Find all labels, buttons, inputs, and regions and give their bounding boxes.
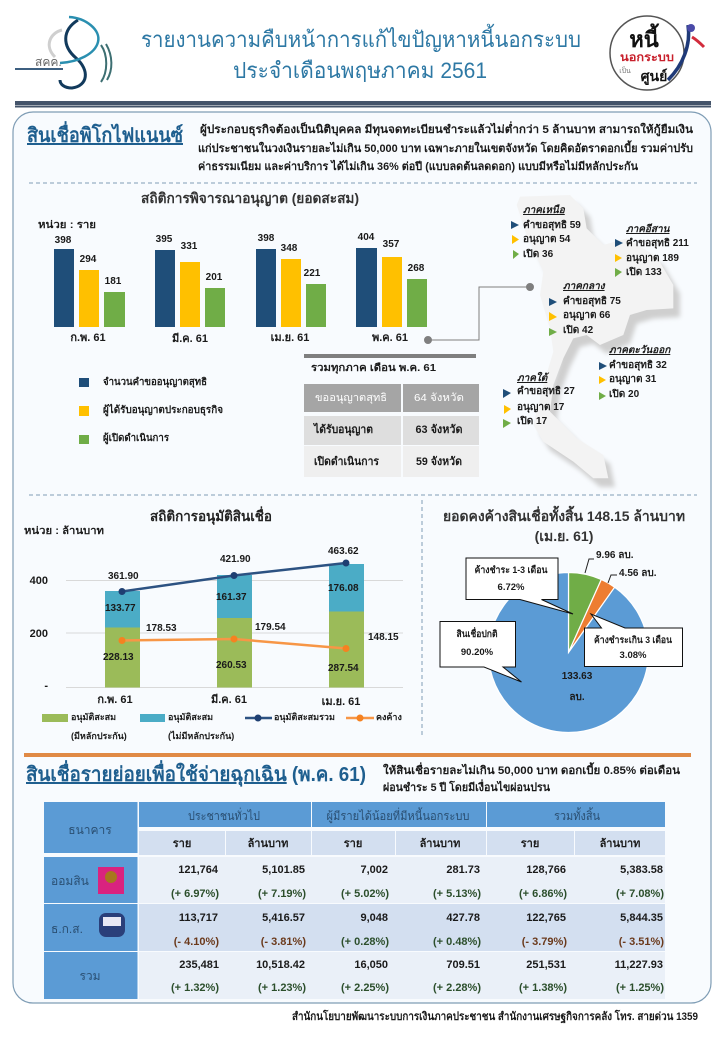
table headers [44,802,665,855]
table headers: ธนาคาร [68,823,112,837]
row: GSB: (+ 7.19%) [258,888,306,900]
row: total: (+ 1.38%) [519,982,567,994]
row: GSB: 121,764 [178,864,219,876]
chart title: สถิติการอนุมัติสินเชื่อ [150,506,272,525]
row: GSB: (+ 6.97%) [171,888,219,900]
map: central region: อนุญาต 66 [563,310,611,321]
row: GSB: 5,101.85 [262,864,305,876]
row: BAAC: (- 3.51%) [619,936,664,948]
row: BAAC: (- 3.79%) [522,936,567,948]
callout: overdue 1-3 months: 6.72% [498,582,525,593]
row: GSB: ออมสิน [51,874,89,888]
value labels [103,546,399,674]
map: south region: อนุญาต 17 [517,402,565,413]
callout: normal credit: สินเชื่อปกติ [456,626,498,640]
map: east region: อนุญาต 31 [609,374,657,385]
map: Thailand [517,195,680,487]
map: south region: เปิด 17 [517,415,548,427]
logo: debt to zero: หนี้ [629,23,660,52]
map: northeast region: ภาคอีสาน [626,223,671,235]
row: BAAC: 427.78 [446,912,480,924]
value labels: 228.13 [103,652,134,663]
row: total: 709.51 [446,959,480,971]
row: BAAC: 5,844.35 [620,912,663,924]
table: all regions summary: รวมทุกภาค เดือน พ.ค. 61 [311,362,436,374]
panel: pico finance intro [27,120,693,173]
heading: pico finance: สินเชื่อพิโกไฟแนนซ์ [27,120,183,147]
table headers: ราย [521,838,539,850]
month labels: เม.ย. 61 [271,332,309,344]
legend: licensing: จำนวนคำขออนุญาตสุทธิ [103,376,207,388]
row: BAAC: 9,048 [360,912,388,924]
legend: credit approvals: (มีหลักประกัน) [71,731,127,741]
row: total: รวม [79,969,101,983]
row: total: 235,481 [179,959,219,971]
text block: emergency credit terms: ผ่อนชำระ 5 ปี โดยมีเงื่อนไขผ่อนปรน [383,779,550,794]
table: all regions summary: ขออนุญาตสุทธิ [315,392,387,404]
axis: - [44,680,48,692]
row: GSB: (+ 6.86%) [519,888,567,900]
legend: credit approvals: คงค้าง [376,712,402,722]
legend: credit approvals: อนุมัติสะสมรวม [274,712,335,723]
logo: debt to zero: เป็น [619,66,631,75]
row: total: 16,050 [354,959,388,971]
table headers: รวมทั้งสิ้น [554,807,600,823]
map: east region: ภาคตะวันออก [609,344,671,356]
slice label: 9.96 [585,550,634,573]
row: total: (+ 2.28%) [433,982,481,994]
cumulative total line [118,560,350,595]
value labels: 178.53 [146,623,177,634]
slice label: 9.96: 9.96 ลบ. [596,550,634,561]
row: BAAC [44,904,665,951]
row: BAAC: 122,765 [526,912,566,924]
pie chart: outstanding credit: (เม.ย. 61) [535,528,593,544]
bar values: 398 [258,233,275,244]
table headers: ล้านบาท [420,837,460,850]
logo: left agency mark [15,17,111,88]
map: northeast region: เปิด 133 [626,266,662,278]
month labels: ก.พ. 61 [97,694,133,706]
map: east region [599,344,671,400]
month labels [70,332,408,345]
logo: debt to zero: ศูนย์ [641,68,667,85]
row: total: (+ 1.32%) [171,982,219,994]
row: GSB: (+ 7.08%) [616,888,664,900]
map: northeast region: อนุญาต 189 [626,253,679,264]
bars [54,248,427,327]
callout: overdue 1-3 months [466,558,573,614]
callout: overdue over 3 months [584,614,682,666]
slice label: normal value: ลบ. [569,692,585,703]
row: total: (+ 1.25%) [616,982,664,994]
map: east region: คำขอสุทธิ 32 [609,359,667,371]
value labels: 463.62 [328,546,359,557]
row: BAAC: (- 4.10%) [174,936,219,948]
bar values [55,232,425,287]
row: GSB: 281.73 [446,864,480,876]
legend: credit approvals: อนุมัติสะสม [168,712,213,723]
axis: 200 [30,628,48,640]
divider: orange [24,753,691,757]
map: north region [511,204,581,260]
legend: credit approvals [42,712,402,741]
logo: debt to zero: นอกระบบ [620,52,674,64]
row: BAAC: 113,717 [179,912,218,924]
bar values: 221 [304,268,321,279]
table: emergency credit by bank [44,802,665,999]
table headers: ประชาชนทั่วไป [188,807,260,823]
map: south region: คำขอสุทธิ 27 [517,385,575,397]
value labels: 287.54 [328,663,359,674]
value labels: 179.54 [255,622,286,633]
table headers: ล้านบาท [248,837,288,850]
legend: licensing: ผู้เปิดดำเนินการ [103,432,170,445]
map: south region: ภาคใต้ [517,371,550,384]
month labels [97,693,360,708]
row: GSB: 128,766 [526,864,566,876]
text block: pico description [198,121,693,173]
pie slices [488,572,648,732]
value labels: 133.77 [105,603,136,614]
text block: pico description: ผู้ประกอบธุรกิจต้องเป็นนิติบุคคล มีทุนจดทะเบียนชำระแล้วไม่ต่ำกว่า 5 ล้านบาท สามารถให้กู้ยืมเงิน [200,121,693,137]
axis: 400 [30,575,48,587]
row: total [44,952,665,999]
value labels: 361.90 [108,571,139,582]
map: north region: ภาคเหนือ [523,204,566,216]
bar values: 268 [408,263,425,274]
month labels: มี.ค. 61 [211,693,247,706]
legend: licensing: ผู้ได้รับอนุญาตประกอบธุรกิจ [103,403,223,417]
table: all regions summary: 64 จังหวัด [414,392,464,404]
callout: overdue over 3 months: 3.08% [620,650,647,661]
title: รายงานความคืบหน้าการแก้ไขปัญหาหนี้นอกระบบ [141,24,581,52]
callout: overdue over 3 months: ค้างชำระเกิน 3 เดือน [594,634,672,646]
row: GSB: (+ 5.02%) [341,888,389,900]
stacked bars [105,564,364,688]
map: south region [503,371,575,428]
text block: pico description: ค่าธรรมเนียม และค่าบริการ ได้ไม่เกิน 36% ต่อปี (แบบลดต้นลดดอก) แบบมีหรือไม่มีหลักประกัน [198,159,638,173]
logo: debt to zero [610,16,704,90]
map: central region [549,281,621,336]
slice label: 4.56: 4.56 ลบ. [619,568,657,579]
value labels: 260.53 [216,660,247,671]
table: all regions summary: ได้รับอนุญาต [312,422,373,437]
chart title: ยอดคงค้างสินเชื่อทั้งสิ้น 148.15 ล้านบาท [443,505,685,524]
map: east region: เปิด 20 [609,388,640,400]
header rule [15,101,711,108]
table: all regions summary: 63 จังหวัด [416,423,462,436]
unit label: หน่วย : ล้านบาท [24,525,104,537]
axis [30,575,403,692]
text block: pico description: แก่ประชาชนในวงเงินรายละไม่เกิน 50,000 บาท เฉพาะภายในเขตจังหวัด โดยคิดอัตราดอกเบี้ย รวมค่าปรับ [198,140,693,155]
slice label: normal value [562,671,593,703]
value labels: 161.37 [216,592,247,603]
bar values: 181 [105,276,122,287]
row: BAAC: (+ 0.48%) [433,936,481,948]
row: GSB: (+ 5.13%) [433,888,481,900]
pie chart: outstanding credit [440,505,685,732]
bar values: 357 [383,239,400,250]
map: north region: เปิด 36 [523,248,554,260]
row: GSB: 5,383.58 [620,864,663,876]
table headers: ผู้มีรายได้น้อยที่มีหนี้นอกระบบ [326,807,470,824]
table headers: ราย [344,838,362,850]
row: BAAC: (- 3.81%) [261,936,306,948]
month labels: มี.ค. 61 [172,332,208,345]
row: total: 10,518.42 [256,959,305,971]
legend: credit approvals: (ไม่มีหลักประกัน) [168,730,234,741]
map: northeast region: คำขอสุทธิ 211 [626,237,689,249]
slice label: 4.56 [608,568,657,583]
table headers: ล้านบาท [600,837,640,850]
legend: credit approvals: อนุมัติสะสม [71,712,116,723]
callout: normal credit: 90.20% [461,647,494,658]
chart title: สถิติการพิจารณาอนุญาต (ยอดสะสม) [141,190,359,207]
callout: overdue 1-3 months: ค้างชำระ 1-3 เดือน [474,564,548,576]
row: total: (+ 2.25%) [341,982,389,994]
map: north region: อนุญาต 54 [523,234,571,245]
table: all regions summary: 59 จังหวัด [416,455,462,468]
bar chart: licensing statistics [38,190,427,345]
text block: emergency credit terms [383,762,680,794]
month labels: เม.ย. 61 [322,696,360,708]
heading: emergency micro credit: สินเชื่อรายย่อยเพื่อใช้จ่ายฉุกเฉิน (พ.ค. 61) [26,759,366,787]
map: central region: ภาคกลาง [563,281,606,292]
month labels: พ.ค. 61 [372,332,408,344]
table: all regions summary [304,354,479,477]
logo: left agency mark: สคค. [35,55,62,69]
legend: licensing [79,376,223,445]
connector to map [424,284,534,344]
row: BAAC: (+ 0.28%) [341,936,389,948]
table: all regions summary: เปิดดำเนินการ [314,455,379,468]
bar values: 398 [55,235,72,246]
row: BAAC: ธ.ก.ส. [51,922,83,936]
value labels: 176.08 [328,583,359,594]
row: total: 11,227.93 [615,959,663,971]
month labels: ก.พ. 61 [70,332,106,344]
chart: credit approval statistics [24,506,403,708]
value labels: 148.15 [368,632,399,643]
map: central region: เปิด 42 [563,324,594,336]
value labels: 421.90 [220,554,251,565]
slice label: normal value: 133.63 [562,671,593,682]
bar values: 404 [358,232,375,243]
bar values: 331 [181,241,198,252]
map: northeast region [615,223,689,278]
callout: normal credit [440,622,522,682]
map: central region: คำขอสุทธิ 75 [563,295,621,307]
text block: emergency credit terms: ให้สินเชื่อรายละไม่เกิน 50,000 บาท ดอกเบี้ย 0.85% ต่อเดือน [383,762,680,777]
row: GSB [44,857,665,903]
bar values: 201 [206,272,223,283]
bar values: 395 [156,234,173,245]
bar values: 348 [281,243,298,254]
row: BAAC: 5,416.57 [262,912,305,924]
row: total: (+ 1.23%) [258,982,306,994]
bar values: 294 [80,254,97,265]
row: GSB: 7,002 [360,864,388,876]
unit label: หน่วย : ราย [38,219,96,231]
title [141,24,581,83]
table headers: ราย [173,838,191,850]
title: ประจำเดือนพฤษภาคม 2561 [233,58,487,83]
map: north region: คำขอสุทธิ 59 [523,219,581,231]
row: total: 251,531 [526,959,566,971]
outstanding line [118,636,350,652]
